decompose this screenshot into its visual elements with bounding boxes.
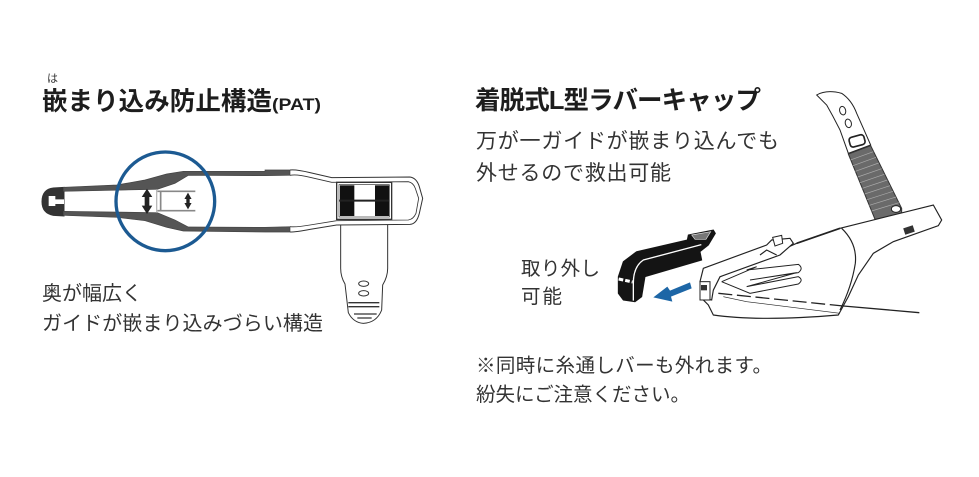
guide front tip xyxy=(42,187,64,216)
heading: left: (PAT) xyxy=(272,95,321,114)
blue arrow xyxy=(653,282,692,302)
raised lever xyxy=(817,92,902,219)
label: removable xyxy=(521,258,600,308)
small end block xyxy=(700,282,710,300)
text block: left description xyxy=(42,282,323,335)
guide body outline xyxy=(290,170,423,232)
text block: note xyxy=(476,355,772,406)
heading: left: は xyxy=(47,72,58,85)
inner narrow slot xyxy=(157,191,195,211)
heading: right: 着脱式L型ラバーキャップ xyxy=(475,87,761,115)
diagram: guide side view xyxy=(618,92,942,318)
double arrows xyxy=(142,189,191,213)
blue highlight circle xyxy=(116,152,215,251)
buckle screw xyxy=(773,235,783,246)
rubber cap xyxy=(618,230,715,302)
label: removable: 取り外し xyxy=(521,258,600,280)
heading: left xyxy=(42,72,321,116)
text block: note: ※同時に糸通しバーも外れます。 xyxy=(476,355,772,377)
text block: right description: 外せるので救出可能 xyxy=(476,162,671,185)
text block: left description: 奥が幅広く xyxy=(42,282,142,305)
diagram: guide top view xyxy=(42,152,423,323)
square mark xyxy=(903,225,915,235)
text block: right description xyxy=(476,130,779,185)
pull tab xyxy=(341,225,388,323)
text block: right description: 万が一ガイドが嵌まり込んでも xyxy=(476,130,779,153)
guide dark upper rail xyxy=(63,170,290,191)
dashed thread bar xyxy=(718,293,919,313)
buckle mesh xyxy=(337,182,392,219)
text block: left description: ガイドが嵌まり込みづらい構造 xyxy=(42,312,323,335)
heading: left: 嵌まり込み防止構造 xyxy=(42,88,272,116)
text block: note: 紛失にご注意ください。 xyxy=(476,384,690,406)
guide dark lower rail xyxy=(63,211,290,232)
label: removable: 可能 xyxy=(521,286,562,308)
guide body side xyxy=(700,205,942,318)
